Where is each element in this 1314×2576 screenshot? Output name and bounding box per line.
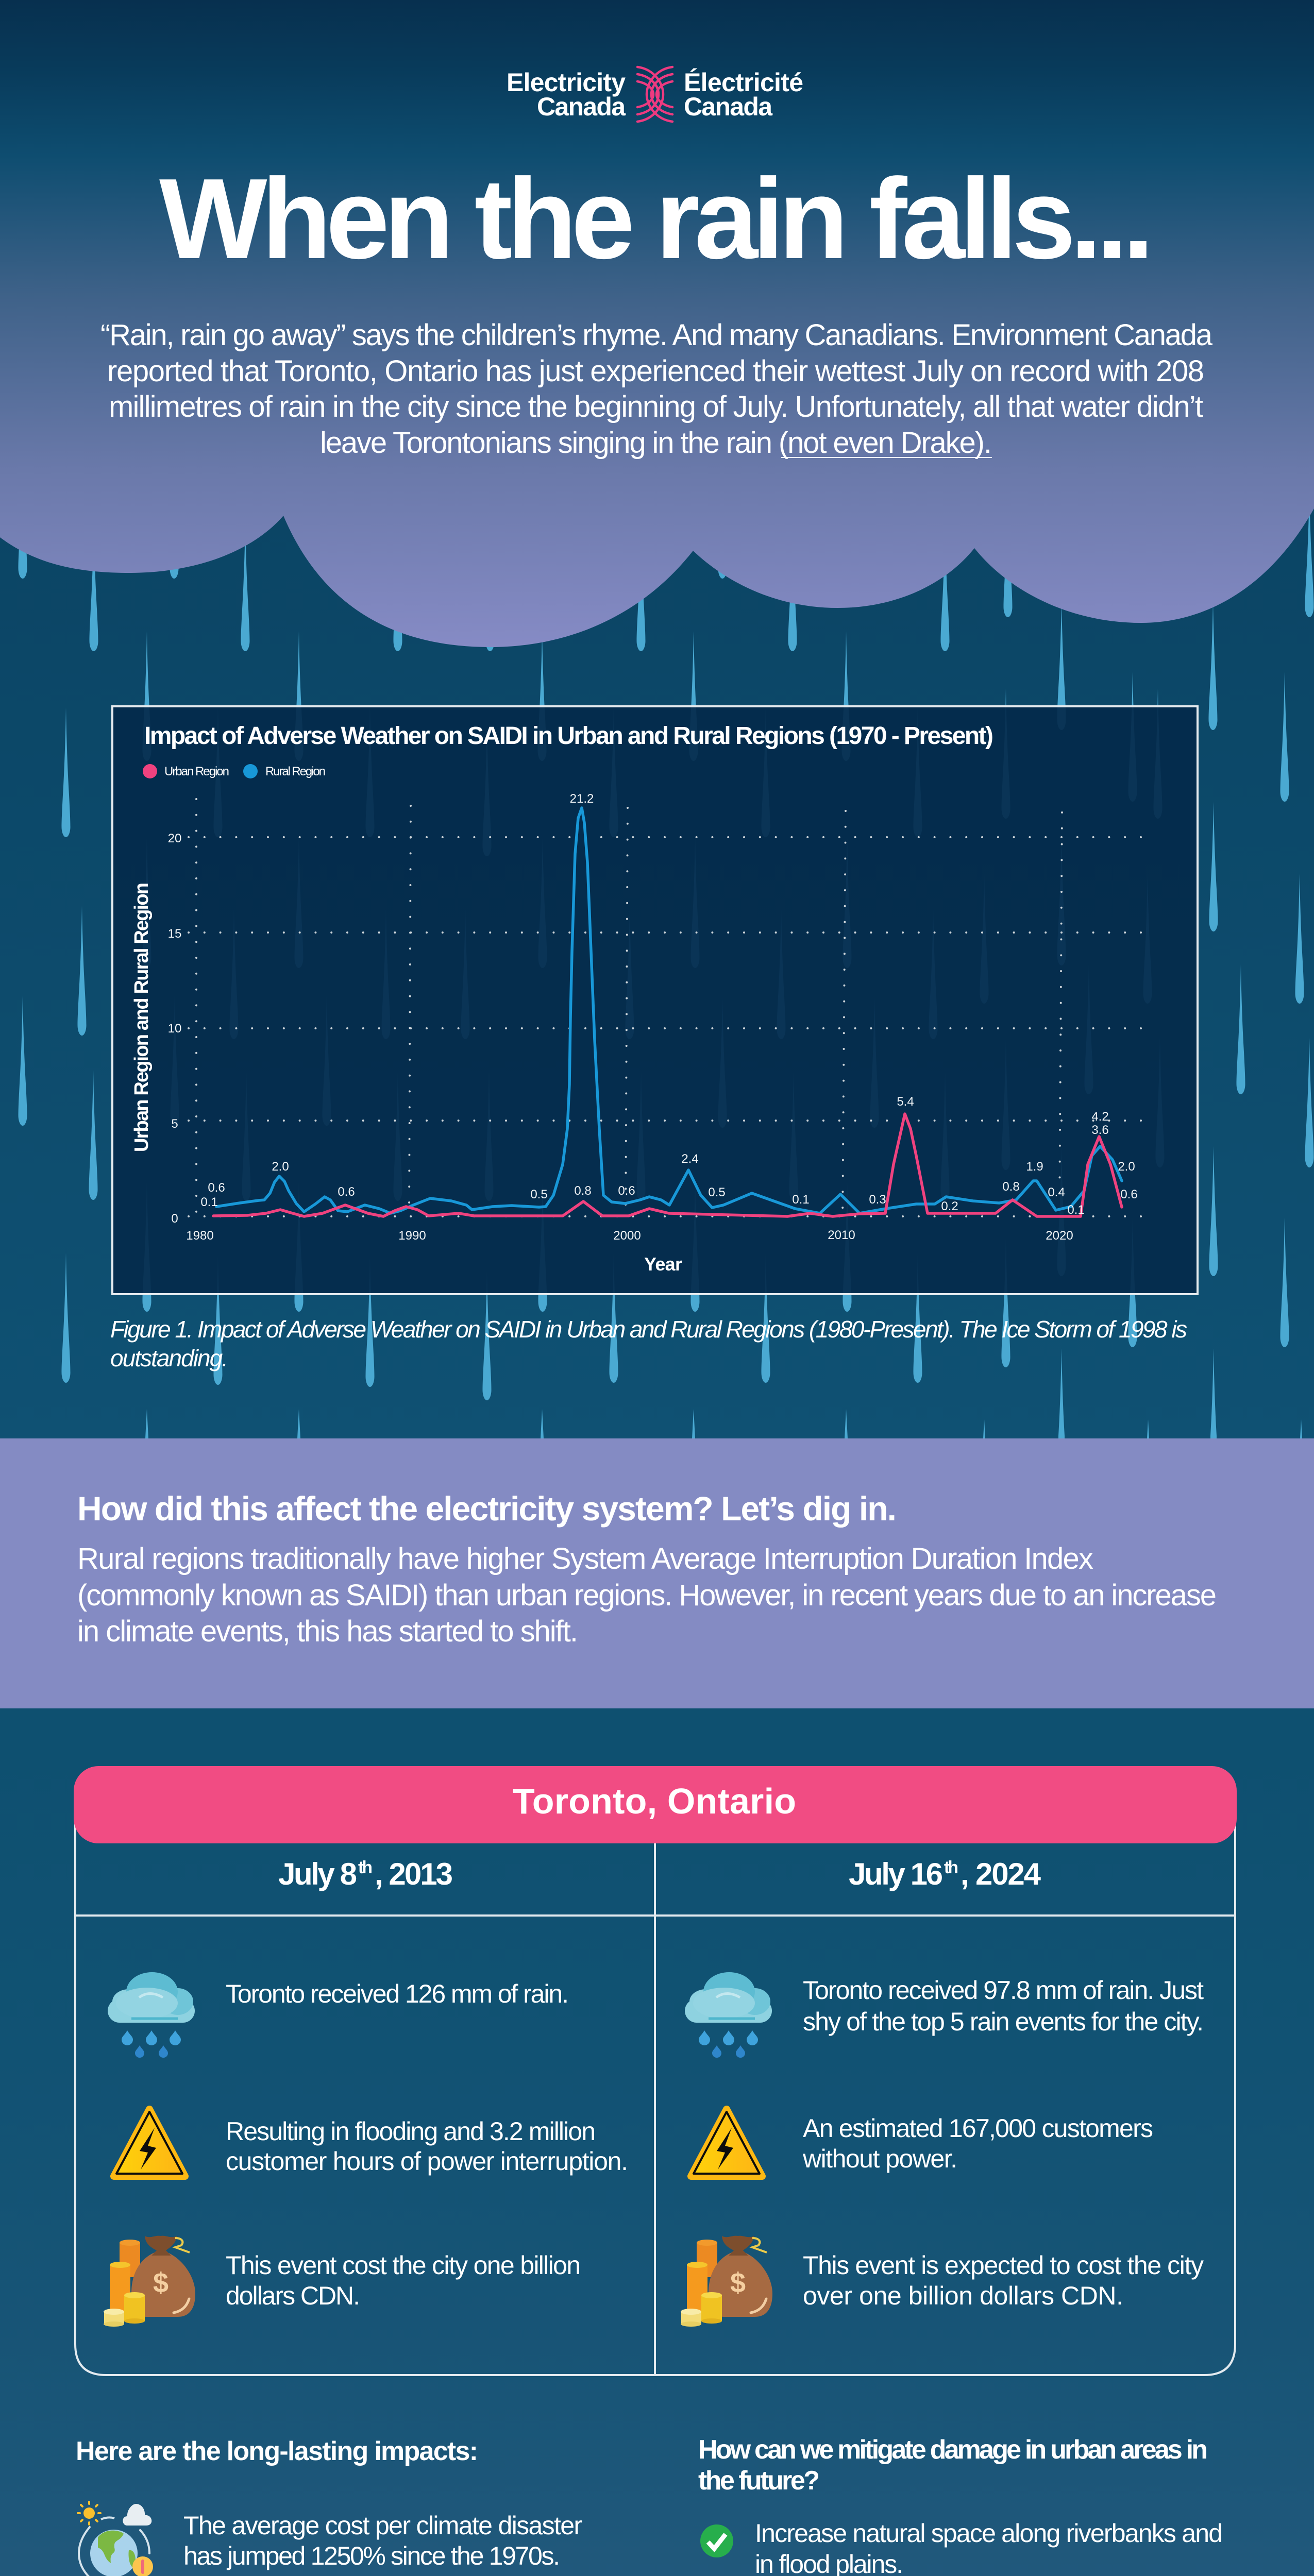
x axis ticks	[186, 1228, 1073, 1243]
row: outage 2024	[691, 2109, 1153, 2176]
data labels: 2.0	[272, 1160, 289, 1174]
data labels: 0.6	[208, 1181, 225, 1195]
data labels: 3.6	[1091, 1123, 1109, 1137]
figure caption	[110, 1316, 1187, 1371]
data labels: 0.6	[1120, 1188, 1138, 1201]
heading: long-lasting impacts: Here are the long-lasting impacts:	[76, 2436, 478, 2466]
x axis ticks: 2000	[613, 1229, 641, 1243]
y axis ticks: 5	[171, 1117, 178, 1131]
explanation text: Rural regions traditionally have higher System Average Interruption Duration Index	[77, 1542, 1093, 1575]
background: lower section gradient	[0, 1708, 1314, 2576]
date: July 8 2013	[278, 1857, 453, 1891]
data labels: 0.3	[869, 1193, 886, 1207]
data labels: 0.6	[618, 1184, 635, 1198]
data labels: 0.1	[1067, 1203, 1085, 1217]
y axis label: Urban Region and Rural Region	[131, 883, 153, 1152]
data labels: 2.0	[1118, 1160, 1135, 1174]
chart title: Impact of Adverse Weather on SAIDI in Urban and Rural Regions (1970 - Present)	[144, 722, 993, 750]
mitigation item 1: Increase natural space along riverbanks and	[755, 2519, 1223, 2548]
impact text 1	[183, 2511, 582, 2570]
logo: Electricity Canada	[507, 67, 803, 122]
logo: Electricity Canada: Electricity	[507, 68, 626, 97]
heading: mitigation	[698, 2435, 1208, 2496]
row: rain 2013: Toronto received 126 mm of rain.	[226, 1979, 569, 2008]
date: July 8 2013: July 8	[278, 1857, 357, 1891]
data labels: 0.4	[1048, 1185, 1065, 1199]
date: July 8 2013: th	[358, 1858, 373, 1877]
data labels: 2.4	[681, 1152, 699, 1166]
row: rain 2013	[108, 1972, 569, 2058]
data labels: 0.1	[200, 1195, 218, 1209]
y axis ticks: 0	[171, 1212, 178, 1226]
date: July 8 2013: , 2013	[375, 1857, 453, 1891]
figure caption: outstanding.	[110, 1345, 228, 1371]
x axis ticks: 2020	[1046, 1229, 1073, 1243]
intro paragraph	[100, 318, 1213, 460]
storm cloud header background	[0, 0, 1314, 647]
data labels: 0.1	[792, 1193, 810, 1207]
mitigation item 1	[700, 2519, 1223, 2576]
impact text 1: has jumped 1250% since the 1970s.	[183, 2541, 560, 2570]
row: outage 2013: Resulting in flooding and 3.2 million	[226, 2117, 596, 2146]
logo: Electricity Canada: Canada	[684, 92, 773, 121]
date: July 16 2024	[849, 1857, 1041, 1891]
chart legend	[143, 764, 326, 778]
row: outage 2024: An estimated 167,000 customers	[803, 2114, 1153, 2143]
logo: Electricity Canada: Électricité	[684, 68, 803, 97]
row: rain 2024: shy of the top 5 rain events for the city.	[803, 2007, 1204, 2036]
x axis ticks: 1990	[398, 1229, 426, 1243]
heading: How did this affect the electricity system? Let’s dig in.	[77, 1489, 897, 1528]
logo: Electricity Canada: Canada	[537, 92, 626, 121]
chart legend: Urban Region	[164, 765, 229, 778]
impact text 1: The average cost per climate disaster	[183, 2511, 582, 2540]
intro paragraph: millimetres of rain in the city since the beginning of July. Unfortunately, all that water didn’t	[109, 390, 1203, 423]
data labels: 21.2	[570, 792, 594, 806]
title: When the rain falls...	[159, 155, 1154, 283]
row: outage 2013	[114, 2109, 628, 2176]
data labels: 0.2	[941, 1199, 958, 1213]
heading: mitigation: How can we mitigate damage in urban areas in	[698, 2435, 1208, 2465]
intro paragraph: “Rain, rain go away” says the children’s rhyme. And many Canadians. Environment Canada	[100, 318, 1213, 352]
row: cost 2024: over one billion dollars CDN.	[803, 2281, 1123, 2310]
rain drops	[19, 449, 1314, 1400]
panel: SAIDI line chart	[112, 706, 1198, 1294]
x axis ticks: 1980	[186, 1229, 214, 1243]
intro paragraph: reported that Toronto, Ontario has just experienced their wettest July on record with 208	[107, 354, 1204, 388]
header bar	[74, 1766, 1237, 1843]
data labels: 4.2	[1091, 1110, 1109, 1124]
y axis ticks: 15	[168, 927, 181, 941]
chart legend: Rural Region	[265, 765, 326, 778]
explanation text: in climate events, this has started to shift.	[77, 1615, 578, 1648]
figure caption: Figure 1. Impact of Adverse Weather on SAIDI in Urban and Rural Regions (1980-Present). The Ice Storm of 1998 is	[110, 1316, 1187, 1343]
row: cost 2013: dollars CDN.	[226, 2281, 360, 2310]
row: rain 2024	[685, 1972, 1204, 2058]
data labels: 1.9	[1026, 1160, 1043, 1174]
heading: mitigation: the future?	[698, 2466, 820, 2496]
data labels: 0.5	[708, 1185, 726, 1199]
y axis ticks	[168, 832, 181, 1226]
rural line	[216, 808, 1122, 1213]
date: July 16 2024: , 2024	[961, 1857, 1041, 1891]
row: cost 2024	[681, 2236, 1204, 2327]
background: rain section	[0, 515, 1314, 1438]
date: July 16 2024: July 16	[849, 1857, 943, 1891]
x axis ticks: 2010	[828, 1228, 855, 1242]
y axis ticks: 10	[168, 1022, 181, 1036]
data labels: 0.8	[1002, 1180, 1020, 1194]
row: rain 2024: Toronto received 97.8 mm of rain. Just	[803, 1976, 1204, 2005]
row: outage 2013: customer hours of power interruption.	[226, 2147, 628, 2176]
data labels: 0.6	[338, 1185, 355, 1199]
explanation text: (commonly known as SAIDI) than urban regions. However, in recent years due to an increase	[77, 1579, 1217, 1612]
explanation text	[77, 1542, 1217, 1648]
y axis ticks: 20	[168, 832, 181, 845]
icon: globe with sun and cloud	[78, 2502, 153, 2576]
rain drops clipped at band	[145, 1348, 1302, 1438]
panel: how did this affect	[0, 1438, 1314, 1708]
row: cost 2013: This event cost the city one billion	[226, 2251, 581, 2280]
data labels: 5.4	[897, 1095, 914, 1109]
intro paragraph: leave Torontonians singing in the rain (not even Drake).	[320, 426, 992, 460]
row: cost 2024: This event is expected to cost the city	[803, 2251, 1204, 2280]
header bar: Toronto, Ontario	[513, 1781, 796, 1821]
panel: Toronto comparison	[74, 1766, 1237, 2375]
data labels: 0.5	[530, 1188, 548, 1201]
data labels: 0.8	[574, 1184, 592, 1198]
x axis label: Year	[644, 1253, 682, 1275]
row: cost 2013	[104, 2236, 581, 2327]
urban line	[213, 1114, 1122, 1216]
date: July 16 2024: th	[944, 1858, 958, 1877]
row: outage 2024: without power.	[802, 2144, 957, 2173]
data labels	[200, 792, 1138, 1217]
